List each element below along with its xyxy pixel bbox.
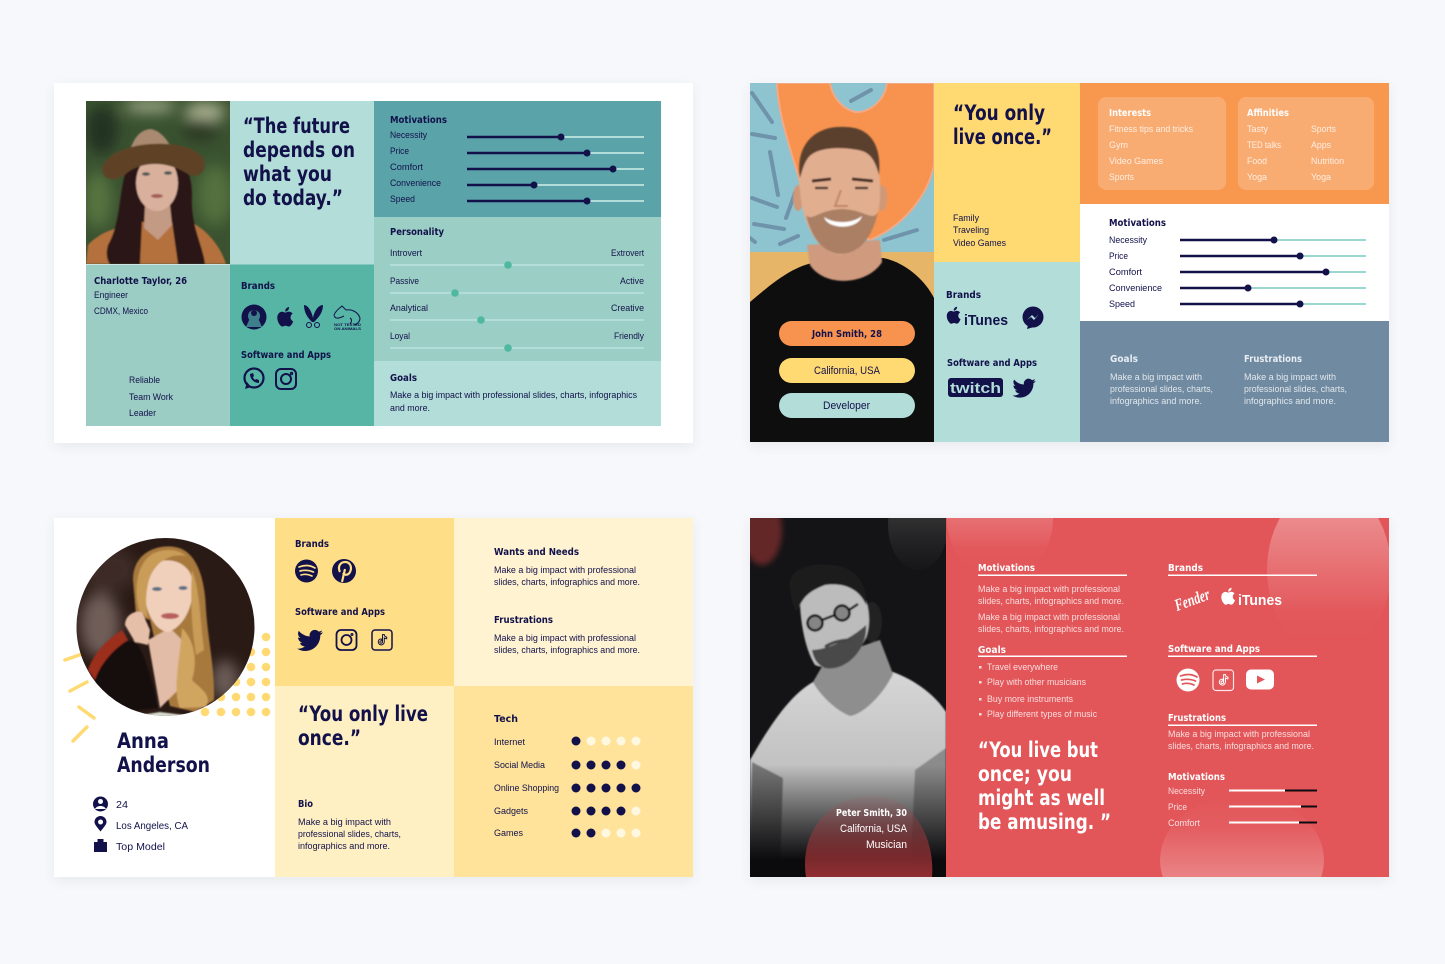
quote and bio panel: Make a big impact with [298,817,391,827]
quote and bio panel: infographics and more. [298,841,390,851]
quote: once; you [978,762,1072,786]
red content panel: Comfort [1168,818,1200,828]
motivations panel [374,101,661,217]
slider bars [467,134,644,204]
motivations panel: Convenience [390,178,441,188]
name: Anderson [117,753,210,777]
icon: tiktok [1213,670,1234,690]
quote panel: Video Games [953,238,1006,248]
quote panel: “You only [953,101,1045,125]
icon: ribbon logo [304,305,323,328]
goals bullet list: Buy more instruments [987,694,1073,704]
decorative yellow rays [65,654,94,741]
logo: iTunes: iTunes [1238,592,1282,609]
wants and frustrations panel: Make a big impact with professional [494,633,636,643]
affinities box: Nutrition [1311,156,1344,166]
quote and bio panel: “You only live [298,702,428,726]
red content panel: Make a big impact with professional [978,584,1120,594]
motivations panel: Convenience [1109,283,1162,293]
affinities box: Affinities [1247,108,1289,119]
details list: 24 [116,799,128,811]
motivations panel: Necessity [390,130,427,140]
tech panel [454,686,693,877]
motivations panel: Necessity [1109,235,1147,245]
interests panel: Sports [1109,172,1134,182]
red content panel: slides, charts, infographics and more. [978,624,1124,634]
personality sliders [390,261,644,352]
logo: iTunes [1221,588,1282,609]
red content panel: Motivations [978,563,1035,574]
tech panel: Games [494,828,523,838]
red content panel: Make a big impact with professional [978,612,1120,622]
caption: California, USA [840,823,908,835]
motivations panel: Speed [1109,299,1135,309]
affinities box: Food [1247,156,1267,166]
interests panel [1080,83,1389,204]
persona card: Anna Anderson [58,518,1389,880]
interests panel: Interests [1109,108,1151,119]
tech panel: Tech [494,714,518,725]
wants and frustrations panel: slides, charts, infographics and more. [494,577,640,587]
logo: Fender: Fender [1171,585,1212,615]
brands and apps panel [230,264,374,426]
persona card: Charlotte Taylor [54,83,693,447]
wants and frustrations panel: slides, charts, infographics and more. [494,645,640,655]
affinities box: Tasty [1247,124,1268,134]
personality panel: Analytical [390,303,428,313]
goals and frustrations panel: infographics and more. [1244,396,1336,406]
goals and frustrations panel: Frustrations [1244,354,1302,365]
profile panel: Engineer [94,290,128,300]
icon: messenger [1022,306,1044,329]
quote [978,738,1111,834]
brands and apps panel: Brands [241,281,275,292]
brands and apps panel: Brands [295,539,329,550]
pill: location [779,358,915,383]
personality panel: Introvert [390,248,422,258]
brands and apps panel: Software and Apps [295,607,385,618]
caption [836,808,908,851]
quote: “You live but [978,738,1098,762]
profile panel: Team Work [129,392,173,402]
red content panel: Brands [1168,563,1203,574]
details list: Los Angeles, CA [116,820,188,832]
personality panel: Creative [611,303,644,313]
pill: job: Developer [823,400,870,412]
icon: person [93,796,108,812]
affinities box: TED talks [1247,140,1281,150]
portrait photo: woman in brown hat [84,99,233,264]
brands and apps panel [275,518,454,686]
name: Anna [117,729,169,753]
wants and frustrations panel: Frustrations [494,615,553,626]
icon: map pin [94,816,106,832]
goals bullet list: Play different types of music [987,709,1097,719]
icon: apple [277,307,293,327]
goals bullet list: Travel everywhere [987,662,1058,672]
tech panel: Internet [494,737,525,747]
goals and frustrations panel: professional slides, charts, [1244,384,1347,394]
icon: twitter [297,630,323,651]
wants and frustrations panel: Make a big impact with professional [494,565,636,575]
tech panel: Online Shopping [494,783,559,793]
motivations panel: Comfort [390,162,424,172]
quote: might as well [978,786,1105,810]
affinities box: Sports [1311,124,1336,134]
decorative yellow dots [201,633,270,716]
quote panel: depends on [243,138,355,162]
pill: location: California, USA [814,365,881,377]
quote panel: do today.” [243,186,343,210]
red content panel: slides, charts, infographics and more. [1168,741,1314,751]
goals panel: Make a big impact with professional slides, charts, infographics [390,390,637,400]
icon: instagram [276,369,296,389]
goals panel: Goals [390,373,417,384]
interests panel: Fitness tips and tricks [1109,124,1193,134]
motivations panel: Motivations [390,115,447,126]
personality panel: Passive [390,276,419,286]
motivations panel: Price [390,146,409,156]
caption: Musician [866,839,907,851]
profile panel: Reliable [129,375,160,385]
logo: twitch: twitch [950,380,1001,397]
quote panel [230,101,374,264]
red content panel: Necessity [1168,786,1205,796]
red content panel: Frustrations [1168,713,1226,724]
icon: not tested on animals: NOT TESTED [334,323,362,327]
goals panel [374,361,661,426]
slider bars [1229,790,1317,822]
red content panel: Motivations [1168,772,1225,783]
interests panel: Gym [1109,140,1128,150]
goals and frustrations panel: Make a big impact with [1110,372,1202,382]
quote and bio panel [275,686,454,877]
profile panel: Charlotte Taylor, 26 [94,276,187,287]
affinities box: Yoga [1247,172,1267,182]
tech panel: Gadgets [494,806,528,816]
icon: instagram [336,630,356,650]
name [117,729,210,777]
affinities box [1238,97,1374,190]
quote and bio panel: professional slides, charts, [298,829,401,839]
portrait photo: blonde woman [76,537,256,717]
red content panel: Goals [978,645,1006,656]
quote panel: what you [243,162,332,186]
quote and bio panel: once.” [298,726,361,750]
goals bullet list [979,662,1097,719]
icon: tiktok [372,630,392,650]
icon: briefcase [94,839,107,852]
goals and frustrations panel: Make a big impact with [1244,372,1336,382]
personality panel [374,217,661,361]
details list [93,796,188,853]
red content panel: Software and Apps [1168,644,1260,655]
logo: iTunes: iTunes [964,312,1008,329]
goals and frustrations panel: infographics and more. [1110,396,1202,406]
caption: Peter Smith, 30 [836,808,907,819]
profile panel [86,264,230,426]
wants and frustrations panel [454,518,693,686]
interests panel: Video Games [1109,156,1163,166]
personality panel: Friendly [614,331,644,341]
personality panel: Loyal [390,331,410,341]
pill: name [779,321,915,346]
red content panel: Make a big impact with professional [1168,729,1310,739]
goals and frustrations panel: Goals [1110,354,1138,365]
pill: name: John Smith, 28 [811,329,882,340]
brands and apps panel: Software and Apps [947,358,1037,369]
motivations panel: Speed [390,194,415,204]
pill: job [779,393,915,418]
personality panel: Active [620,276,644,286]
personality panel: Personality [390,227,444,238]
icon: pinterest [332,559,356,583]
profile panel: Leader [129,408,156,418]
goals bullet list: Play with other musicians [987,677,1086,687]
brands and apps panel [934,262,1080,442]
quote panel: Traveling [953,225,989,235]
motivations panel: Comfort [1109,267,1143,277]
logo: iTunes [947,307,1008,329]
quote panel: “The future [243,114,350,138]
motivations panel: Motivations [1109,218,1166,229]
motivations panel: Price [1109,251,1128,261]
affinities box: Apps [1311,140,1331,150]
quote and bio panel: Bio [298,799,313,810]
brands and apps panel: Software and Apps [241,350,331,361]
affinities box: Yoga [1311,172,1331,182]
profile panel: CDMX, Mexico [94,306,148,316]
portrait photo: smiling man against mural [750,83,934,442]
icon: not tested on animals [334,306,362,331]
goals panel: and more. [390,403,430,413]
wants and frustrations panel: Wants and Needs [494,547,579,558]
persona card: John Smith [750,83,1389,446]
rating dots [572,736,640,838]
goals and frustrations panel [1080,321,1389,442]
personality panel: Extrovert [611,248,644,258]
icon: spotify [295,560,318,582]
motivations panel [1080,204,1389,321]
tech panel: Social Media [494,760,545,770]
icon: not tested on animals: ON ANIMALS [334,327,362,331]
quote panel [934,83,1080,262]
icon: spotify [1176,668,1200,692]
icon: twitter [1012,379,1036,398]
goals and frustrations panel: professional slides, charts, [1110,384,1213,394]
icon: whatsapp [244,368,264,389]
quote panel: Family [953,213,979,223]
quote panel: live once.” [953,125,1052,149]
decorative translucent blobs [947,518,1389,877]
red content panel: Price [1168,802,1187,812]
brands and apps panel: Brands [946,290,981,301]
details list: Top Model [116,841,165,853]
red content panel [946,518,1389,877]
slider bars [1180,236,1366,308]
persona card: Peter Smith [750,518,1389,880]
red content panel: slides, charts, infographics and more. [978,596,1124,606]
portrait photo: man in glasses, black and white [750,518,946,877]
quote: be amusing. ” [978,810,1111,834]
icon: starbucks [242,304,266,330]
icon: youtube [1246,670,1274,690]
